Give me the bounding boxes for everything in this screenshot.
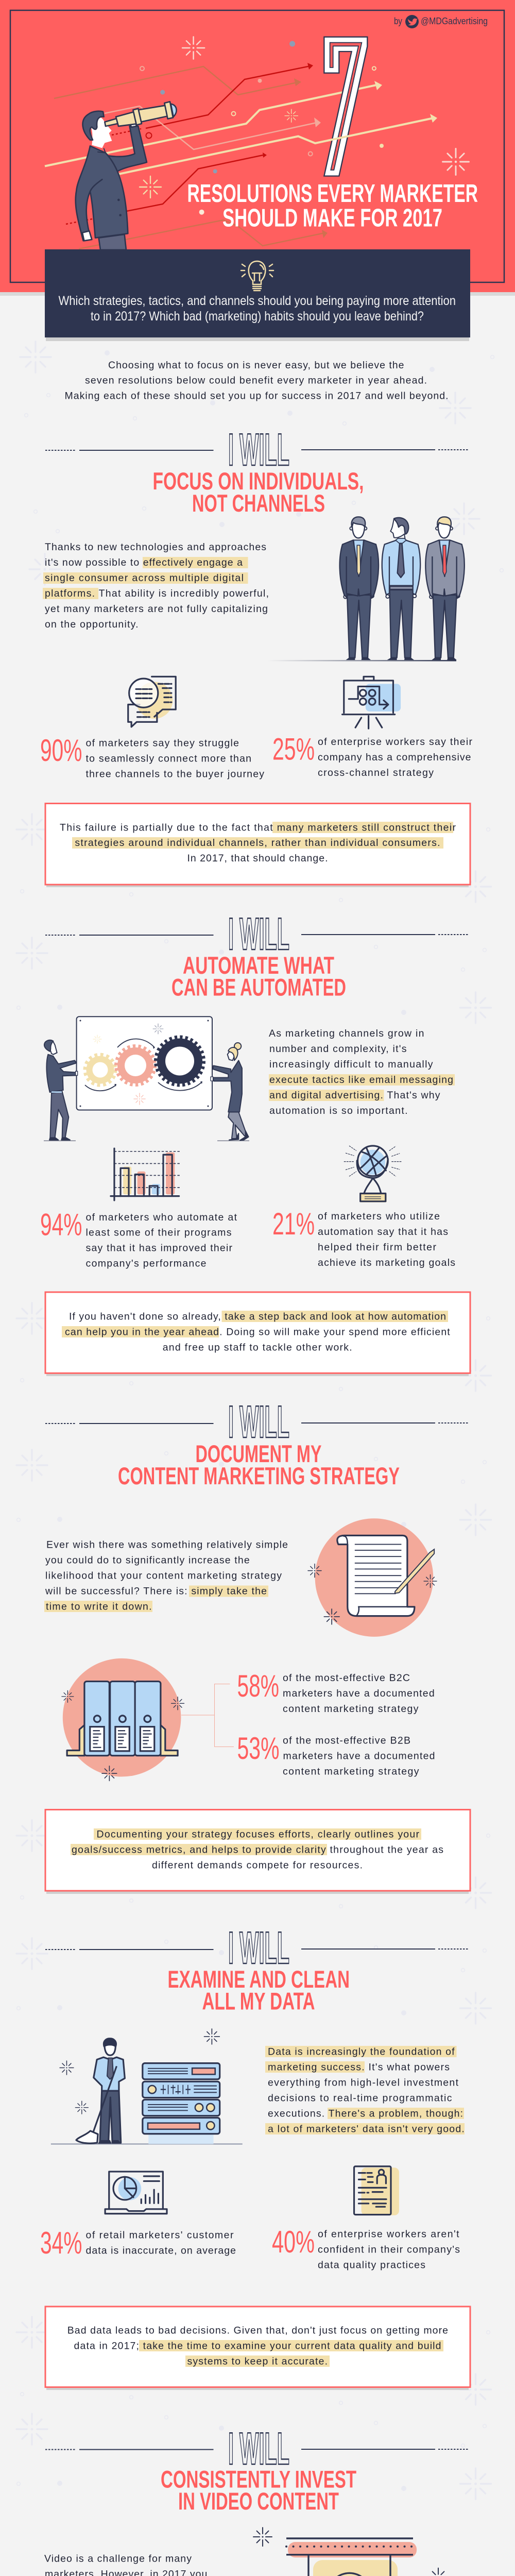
stat: 53 percent: content marketing strategy: [283, 1766, 419, 1777]
section 2 heading: CAN BE AUTOMATED: [171, 974, 346, 1001]
trend lines and arrows: [45, 63, 382, 249]
callout 3: Documenting your strategy focuses efforts, clearly outlines your: [97, 1829, 419, 1840]
illustration: three businessmen: [268, 517, 465, 662]
section 1 heading: NOT CHANNELS: [192, 489, 325, 517]
stat: 25 percent: company has a comprehensive: [318, 752, 471, 763]
stat: 94 percent: of marketers who automate at: [85, 1212, 237, 1223]
section 5 heading: I WILL: [228, 2423, 289, 2474]
section 4 body text: Data is increasingly the foundation of: [268, 2046, 455, 2058]
stat: 94 percent: say that it has improved their: [85, 1243, 233, 1254]
hero sparkles and dots: [140, 37, 469, 215]
section 3 body text: likelihood that your content marketing strategy: [45, 1570, 282, 1582]
section 1 body text: Thanks to new technologies and approaches: [45, 541, 266, 553]
callout 2: [45, 1292, 470, 1376]
woman pushing board: [211, 1043, 249, 1140]
stat: 21 percent: automation say that it has: [318, 1226, 448, 1238]
stat: 58 percent: content marketing strategy: [283, 1703, 419, 1715]
byline with twitter badge: by: [394, 16, 402, 26]
section 3 body text: will be successful? There is: simply take the: [45, 1586, 267, 1597]
section 5 heading: CONSISTENTLY INVEST: [161, 2466, 356, 2493]
intro question text: Which strategies, tactics, and channels should you being paying more attention: [59, 294, 456, 308]
stat: 21 percent: of marketers who utilize: [318, 1211, 440, 1222]
section 1 body text: platforms. That ability is incredibly powerful,: [45, 588, 269, 599]
stat: 58 percent: [237, 1669, 435, 1715]
section 2 heading: I WILL: [228, 908, 289, 959]
callout 2: If you haven't done so already, take a step back and look at how automation: [69, 1311, 446, 1322]
stat: 90 percent: of marketers say they struggle: [85, 738, 239, 749]
section 4 heading: EXAMINE AND CLEAN: [168, 1965, 350, 1993]
stat: 94 percent: least some of their programs: [85, 1227, 232, 1239]
front trend line: [118, 114, 437, 174]
intro paragraph: seven resolutions below could benefit every marketer in year ahead.: [85, 375, 427, 386]
section 4 body text: marketing success. It's what powers: [268, 2062, 450, 2073]
section 1 body text: yet many marketers are not fully capitalizing: [45, 603, 268, 615]
section 1 heading: [45, 424, 469, 517]
hero frame: [10, 10, 504, 282]
stat: 21 percent: helped their firm better: [318, 1242, 437, 1253]
section 1 heading: FOCUS ON INDIVIDUALS,: [152, 467, 364, 495]
callout 2: can help you in the year ahead. Doing so will make your spend more efficient: [65, 1326, 450, 1337]
stat: 53 percent: marketers have a documented: [283, 1751, 435, 1762]
connector lines: [181, 1684, 234, 1747]
stat: 90 percent: [40, 676, 264, 780]
stat: 21 percent: 21%: [272, 1207, 315, 1241]
stat: 21 percent: [272, 1146, 455, 1268]
stat: 90 percent: three channels to the buyer journey: [85, 769, 264, 780]
section 2 body text: and digital advertising. That's why: [269, 1090, 440, 1101]
stat: 40 percent: data quality practices: [318, 2260, 425, 2271]
stat: 90 percent: 90%: [40, 733, 82, 768]
stat: 34 percent: [40, 2172, 236, 2260]
intro question text: to in 2017? Which bad (marketing) habits should you leave behind?: [91, 309, 424, 324]
stat: 34 percent: 34%: [40, 2226, 82, 2260]
icon: light bulb: [241, 261, 273, 291]
big number 7: [324, 37, 367, 176]
stat: 58 percent: of the most-effective B2C: [283, 1672, 410, 1684]
section 2 body text: automation is so important.: [269, 1105, 408, 1116]
section 4 heading: I WILL: [228, 1922, 289, 1973]
illustration: people holding gears board: [44, 1016, 249, 1141]
illustration: document and pencil: [308, 1518, 437, 1637]
section 3 heading: [45, 1396, 469, 1489]
section 1 body text: single consumer across multiple digital: [45, 572, 244, 584]
section 2 body text: number and complexity, it's: [269, 1043, 407, 1055]
section 4 body text: everything from high-level investment: [268, 2077, 459, 2089]
callout 1: strategies around individual channels, rather than individual consumers.: [75, 837, 440, 849]
byline with twitter badge: @MDGadvertising: [421, 16, 488, 26]
section 3 heading: CONTENT MARKETING STRATEGY: [118, 1462, 400, 1489]
intro paragraph: [65, 360, 448, 402]
illustration: binders: [62, 1658, 184, 1781]
icon: flipchart: [342, 676, 401, 728]
intro paragraph: Choosing what to focus on is never easy, but we believe the: [108, 360, 404, 371]
section 5 heading: IN VIDEO CONTENT: [178, 2487, 339, 2515]
callout 1: In 2017, that should change.: [187, 853, 328, 864]
icon: resume document: [354, 2166, 399, 2215]
section 3 heading: DOCUMENT MY: [196, 1440, 321, 1467]
callout 4: Bad data leads to bad decisions. Given that, don't just focus on getting more: [67, 2325, 448, 2336]
janitor man: [76, 2039, 125, 2144]
stat: 34 percent: of retail marketers' customer: [85, 2230, 234, 2241]
section 4 body text: executions. There's a problem, though:: [268, 2108, 463, 2120]
intro question text: [59, 294, 456, 324]
section 4 body text: a lot of marketers' data isn't very good.: [268, 2124, 465, 2135]
stat: 58 percent: marketers have a documented: [283, 1688, 435, 1699]
icon: chat bubbles: [128, 676, 176, 727]
section 2 body text: [269, 1028, 455, 1116]
icon: globe: [344, 1146, 401, 1202]
illustration: man mopping servers: [51, 2029, 243, 2144]
section 2 body text: increasingly difficult to manually: [269, 1059, 433, 1070]
icon: bar chart: [111, 1148, 180, 1200]
section 4 heading: ALL MY DATA: [202, 1988, 315, 2015]
stat: 40 percent: [272, 2166, 460, 2271]
stat: 25 percent: 25%: [272, 732, 315, 767]
section 5 body text: Video is a challenge for many: [44, 2553, 192, 2565]
section 1 heading: I WILL: [228, 424, 289, 475]
section 2 heading: AUTOMATE WHAT: [183, 952, 334, 979]
stat: 40 percent: confident in their company's: [318, 2244, 460, 2256]
section 3 heading: I WILL: [228, 1396, 289, 1447]
callout 4: systems to keep it accurate.: [187, 2355, 328, 2367]
section 3 body text: time to write it down.: [46, 1601, 152, 1613]
section 5 body text: [43, 2553, 233, 2576]
section 1 body text: it's now possible to effectively engage a: [45, 557, 243, 568]
callout 4: data in 2017; take the time to examine your current data quality and build: [74, 2340, 441, 2351]
stat: 53 percent: [237, 1731, 435, 1777]
section 4 body text: decisions to real-time programmatic: [268, 2093, 452, 2104]
callout 1: [45, 804, 470, 887]
section 2 body text: execute tactics like email messaging: [269, 1074, 453, 1086]
callout 3: [45, 1809, 470, 1894]
stat: 94 percent: [40, 1148, 237, 1269]
section 3 body text: [44, 1539, 288, 1613]
section 1 body text: [43, 541, 269, 630]
section 3 body text: Ever wish there was something relatively simple: [46, 1539, 288, 1551]
stat: 90 percent: to seamlessly connect more than: [85, 753, 251, 765]
stat: 25 percent: of enterprise workers say their: [318, 736, 473, 748]
man pushing board: [44, 1040, 78, 1140]
servers: [143, 2063, 220, 2144]
board with gears: [77, 1016, 212, 1110]
illustration: film strip: [253, 2528, 448, 2576]
stat: 58 percent: 58%: [237, 1669, 279, 1703]
callout 3: different demands compete for resources.: [152, 1859, 363, 1871]
stat: 40 percent: 40%: [272, 2225, 315, 2259]
section 1 body text: on the opportunity.: [45, 619, 138, 630]
stat: 94 percent: 94%: [40, 1208, 82, 1242]
section 4 body text: [265, 2046, 465, 2135]
stat: 40 percent: of enterprise workers aren't: [318, 2229, 459, 2240]
stat: 94 percent: company's performance: [85, 1258, 206, 1269]
intro question panel: [45, 249, 470, 341]
hero panel: [0, 0, 515, 296]
stat: 25 percent: cross-channel strategy: [318, 767, 434, 778]
byline with twitter badge: [394, 15, 488, 28]
section 2 body text: As marketing channels grow in: [269, 1028, 424, 1039]
man with telescope: [76, 101, 177, 250]
callout 3: goals/success metrics, and helps to provide clarity throughout the year as: [72, 1844, 443, 1855]
stat: 53 percent: 53%: [237, 1731, 279, 1766]
callout 4: [45, 2307, 470, 2390]
intro paragraph: Making each of these should set you up for success in 2017 and well beyond.: [65, 391, 448, 402]
section 2 heading: [45, 908, 469, 1001]
callout 2: and free up staff to tackle other work.: [163, 1342, 352, 1353]
section 4 heading: [45, 1922, 469, 2015]
stat: 25 percent: [272, 676, 473, 778]
stat: 53 percent: of the most-effective B2B: [283, 1735, 410, 1747]
section 3 body text: you could do to significantly increase the: [45, 1555, 250, 1566]
hero title: [187, 180, 478, 232]
stat: 34 percent: data is inaccurate, on average: [85, 2245, 236, 2257]
icon: laptop analytics: [105, 2172, 167, 2214]
stat: 21 percent: achieve its marketing goals: [318, 1257, 455, 1268]
section 5 heading: [45, 2423, 469, 2515]
callout 1: This failure is partially due to the fact that many marketers still construct their: [60, 822, 456, 833]
